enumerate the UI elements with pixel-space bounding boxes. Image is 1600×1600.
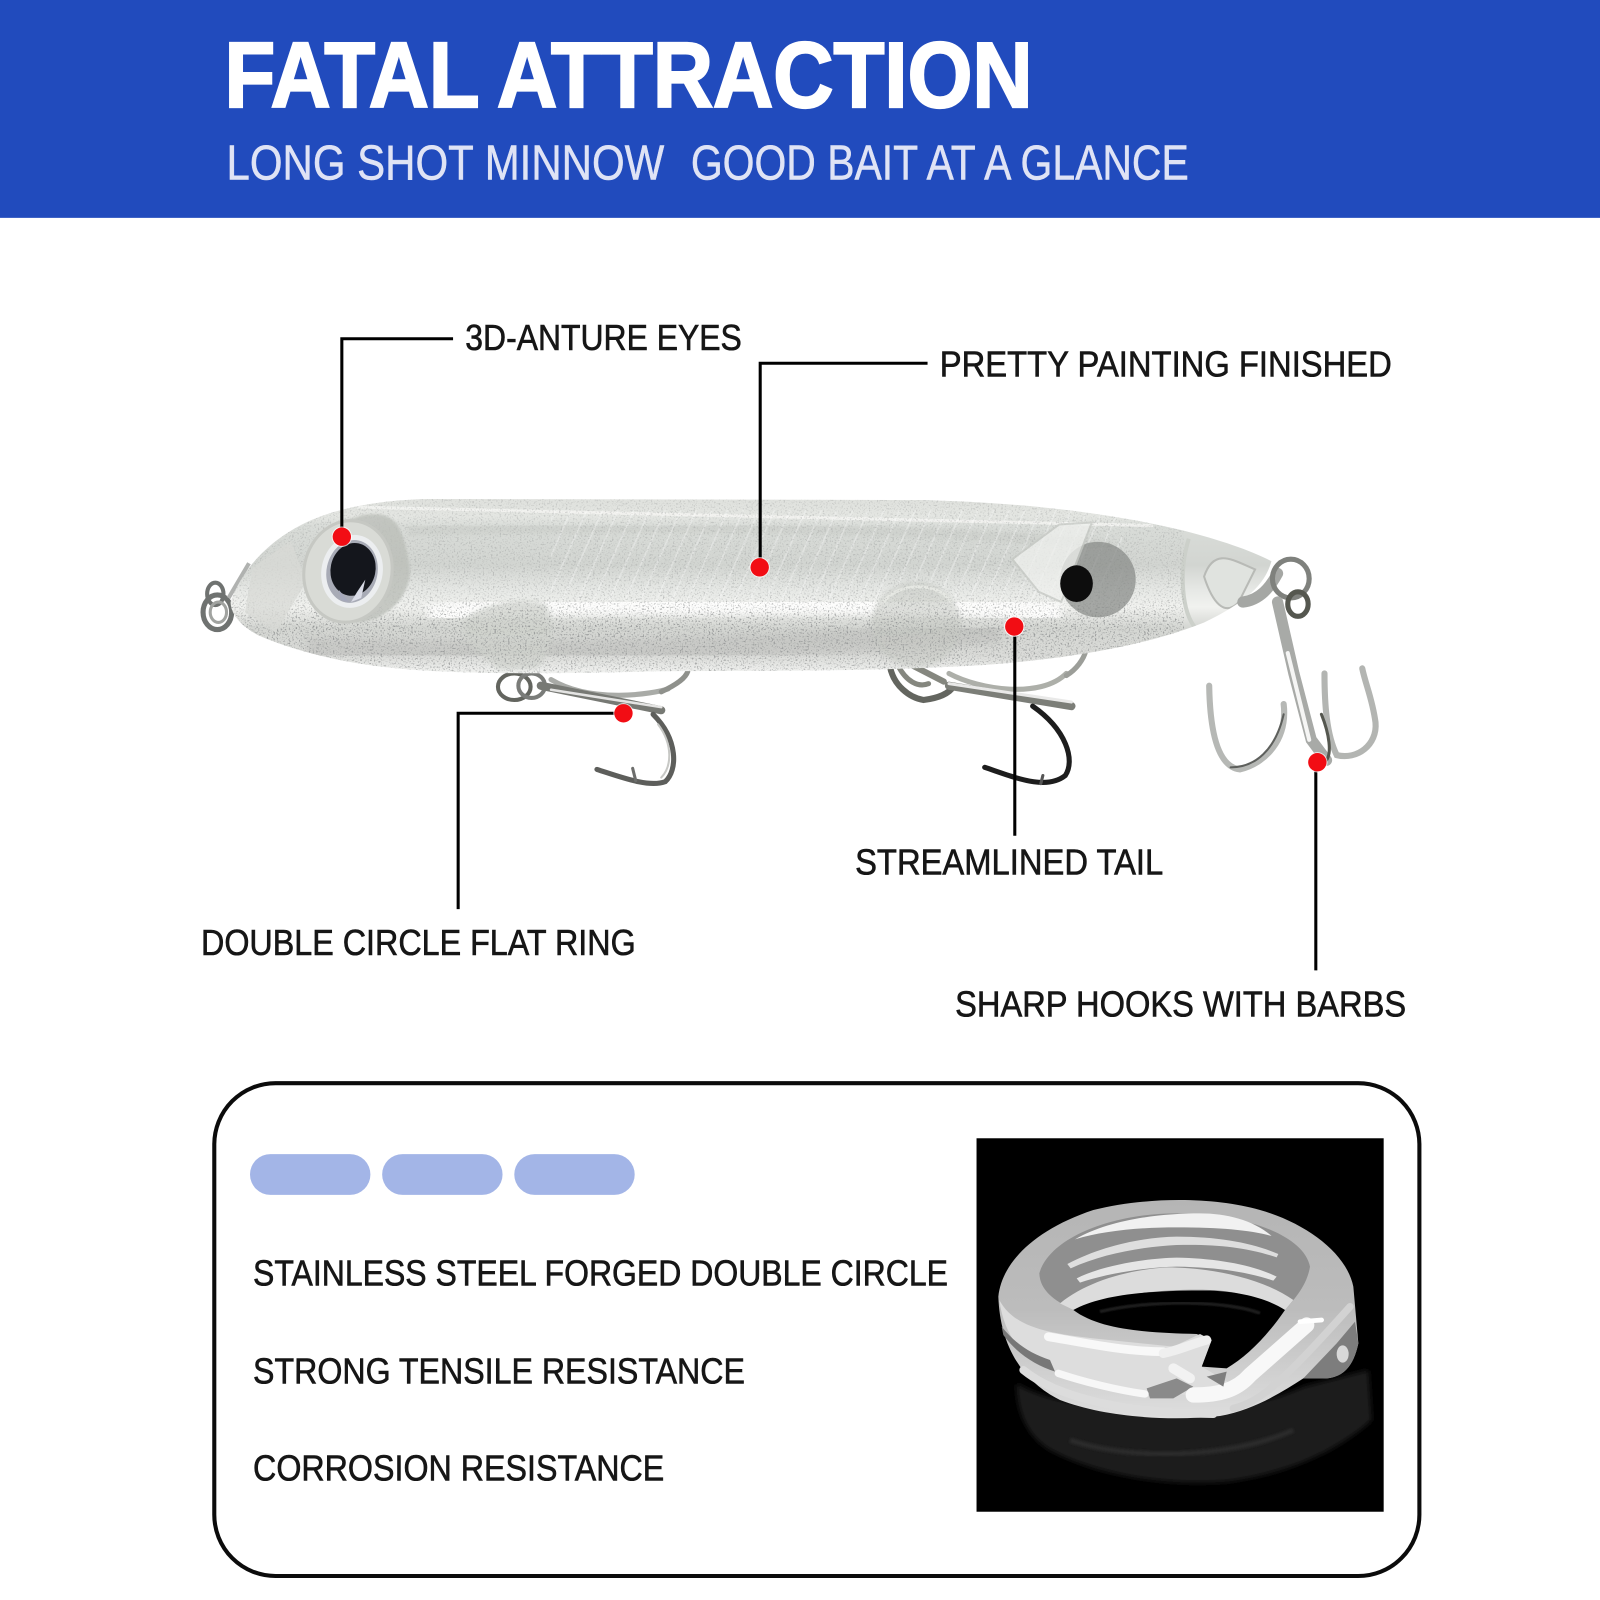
- callout: streamlined tail: [855, 616, 1163, 882]
- middle treble hook: [890, 651, 1086, 784]
- tail section lines: [1183, 539, 1196, 629]
- title: [224, 23, 1033, 127]
- feature text: stainless steel: STAINLESS STEEL FORGED DOUBLE CIRCLE: [253, 1254, 948, 1294]
- split ring photo: [977, 1138, 1384, 1512]
- title: FATAL: [224, 23, 480, 127]
- lower coils: [999, 1300, 1230, 1395]
- callout: 3D-anture eyes: [332, 318, 742, 547]
- lower grey band: [306, 631, 1000, 653]
- callout: sharp hooks with barbs: SHARP HOOKS WITH BARBS: [955, 984, 1406, 1024]
- callout: 3D-anture eyes: 3D-ANTURE EYES: [465, 318, 742, 358]
- callout: sharp hooks with barbs: [955, 752, 1406, 1024]
- panel: split ring details: [214, 1083, 1419, 1576]
- decorative pills: [250, 1154, 635, 1195]
- subtitle: GOOD BAIT AT A GLANCE: [691, 137, 1189, 191]
- feature text: corrosion: CORROSION RESISTANCE: [253, 1449, 664, 1489]
- rear rattle dot: [1060, 565, 1093, 602]
- diagonal streaks: [551, 510, 1122, 587]
- tail treble hook: [1209, 559, 1376, 769]
- subtitle: [227, 137, 1189, 191]
- callout: pretty painting finished: [749, 345, 1392, 578]
- header banner: [0, 0, 1600, 218]
- title: ATTRACTION: [497, 23, 1033, 127]
- feature text: tensile: STRONG TENSILE RESISTANCE: [253, 1352, 745, 1392]
- callout: double circle flat ring: DOUBLE CIRCLE FLAT RING: [201, 923, 636, 963]
- nose ring: [203, 563, 249, 630]
- white highlight band: [429, 604, 1061, 616]
- front belly weight: [461, 601, 551, 669]
- rear belly weight: [871, 582, 961, 667]
- lure illustration: [203, 499, 1376, 784]
- top ridge: [357, 507, 1153, 526]
- ring hole: [1073, 1291, 1285, 1368]
- callout: double circle flat ring: [201, 703, 636, 963]
- callout: pretty painting finished: PRETTY PAINTING FINISHED: [940, 345, 1392, 385]
- front treble hook: [498, 671, 688, 784]
- subtitle: LONG SHOT MINNOW: [227, 137, 665, 191]
- ring body: [998, 1200, 1358, 1418]
- rear rattle chamber: [1060, 542, 1136, 617]
- speckles: [204, 499, 1184, 674]
- ring end tab: [1303, 1322, 1358, 1378]
- ring reflection: [1017, 1370, 1372, 1483]
- head shade: [245, 541, 306, 633]
- callout: streamlined tail: STREAMLINED TAIL: [855, 842, 1163, 882]
- front eye: [294, 512, 401, 630]
- coil highlights: [1075, 1213, 1272, 1239]
- inner wall: [1039, 1213, 1310, 1310]
- lure body: [204, 499, 1271, 674]
